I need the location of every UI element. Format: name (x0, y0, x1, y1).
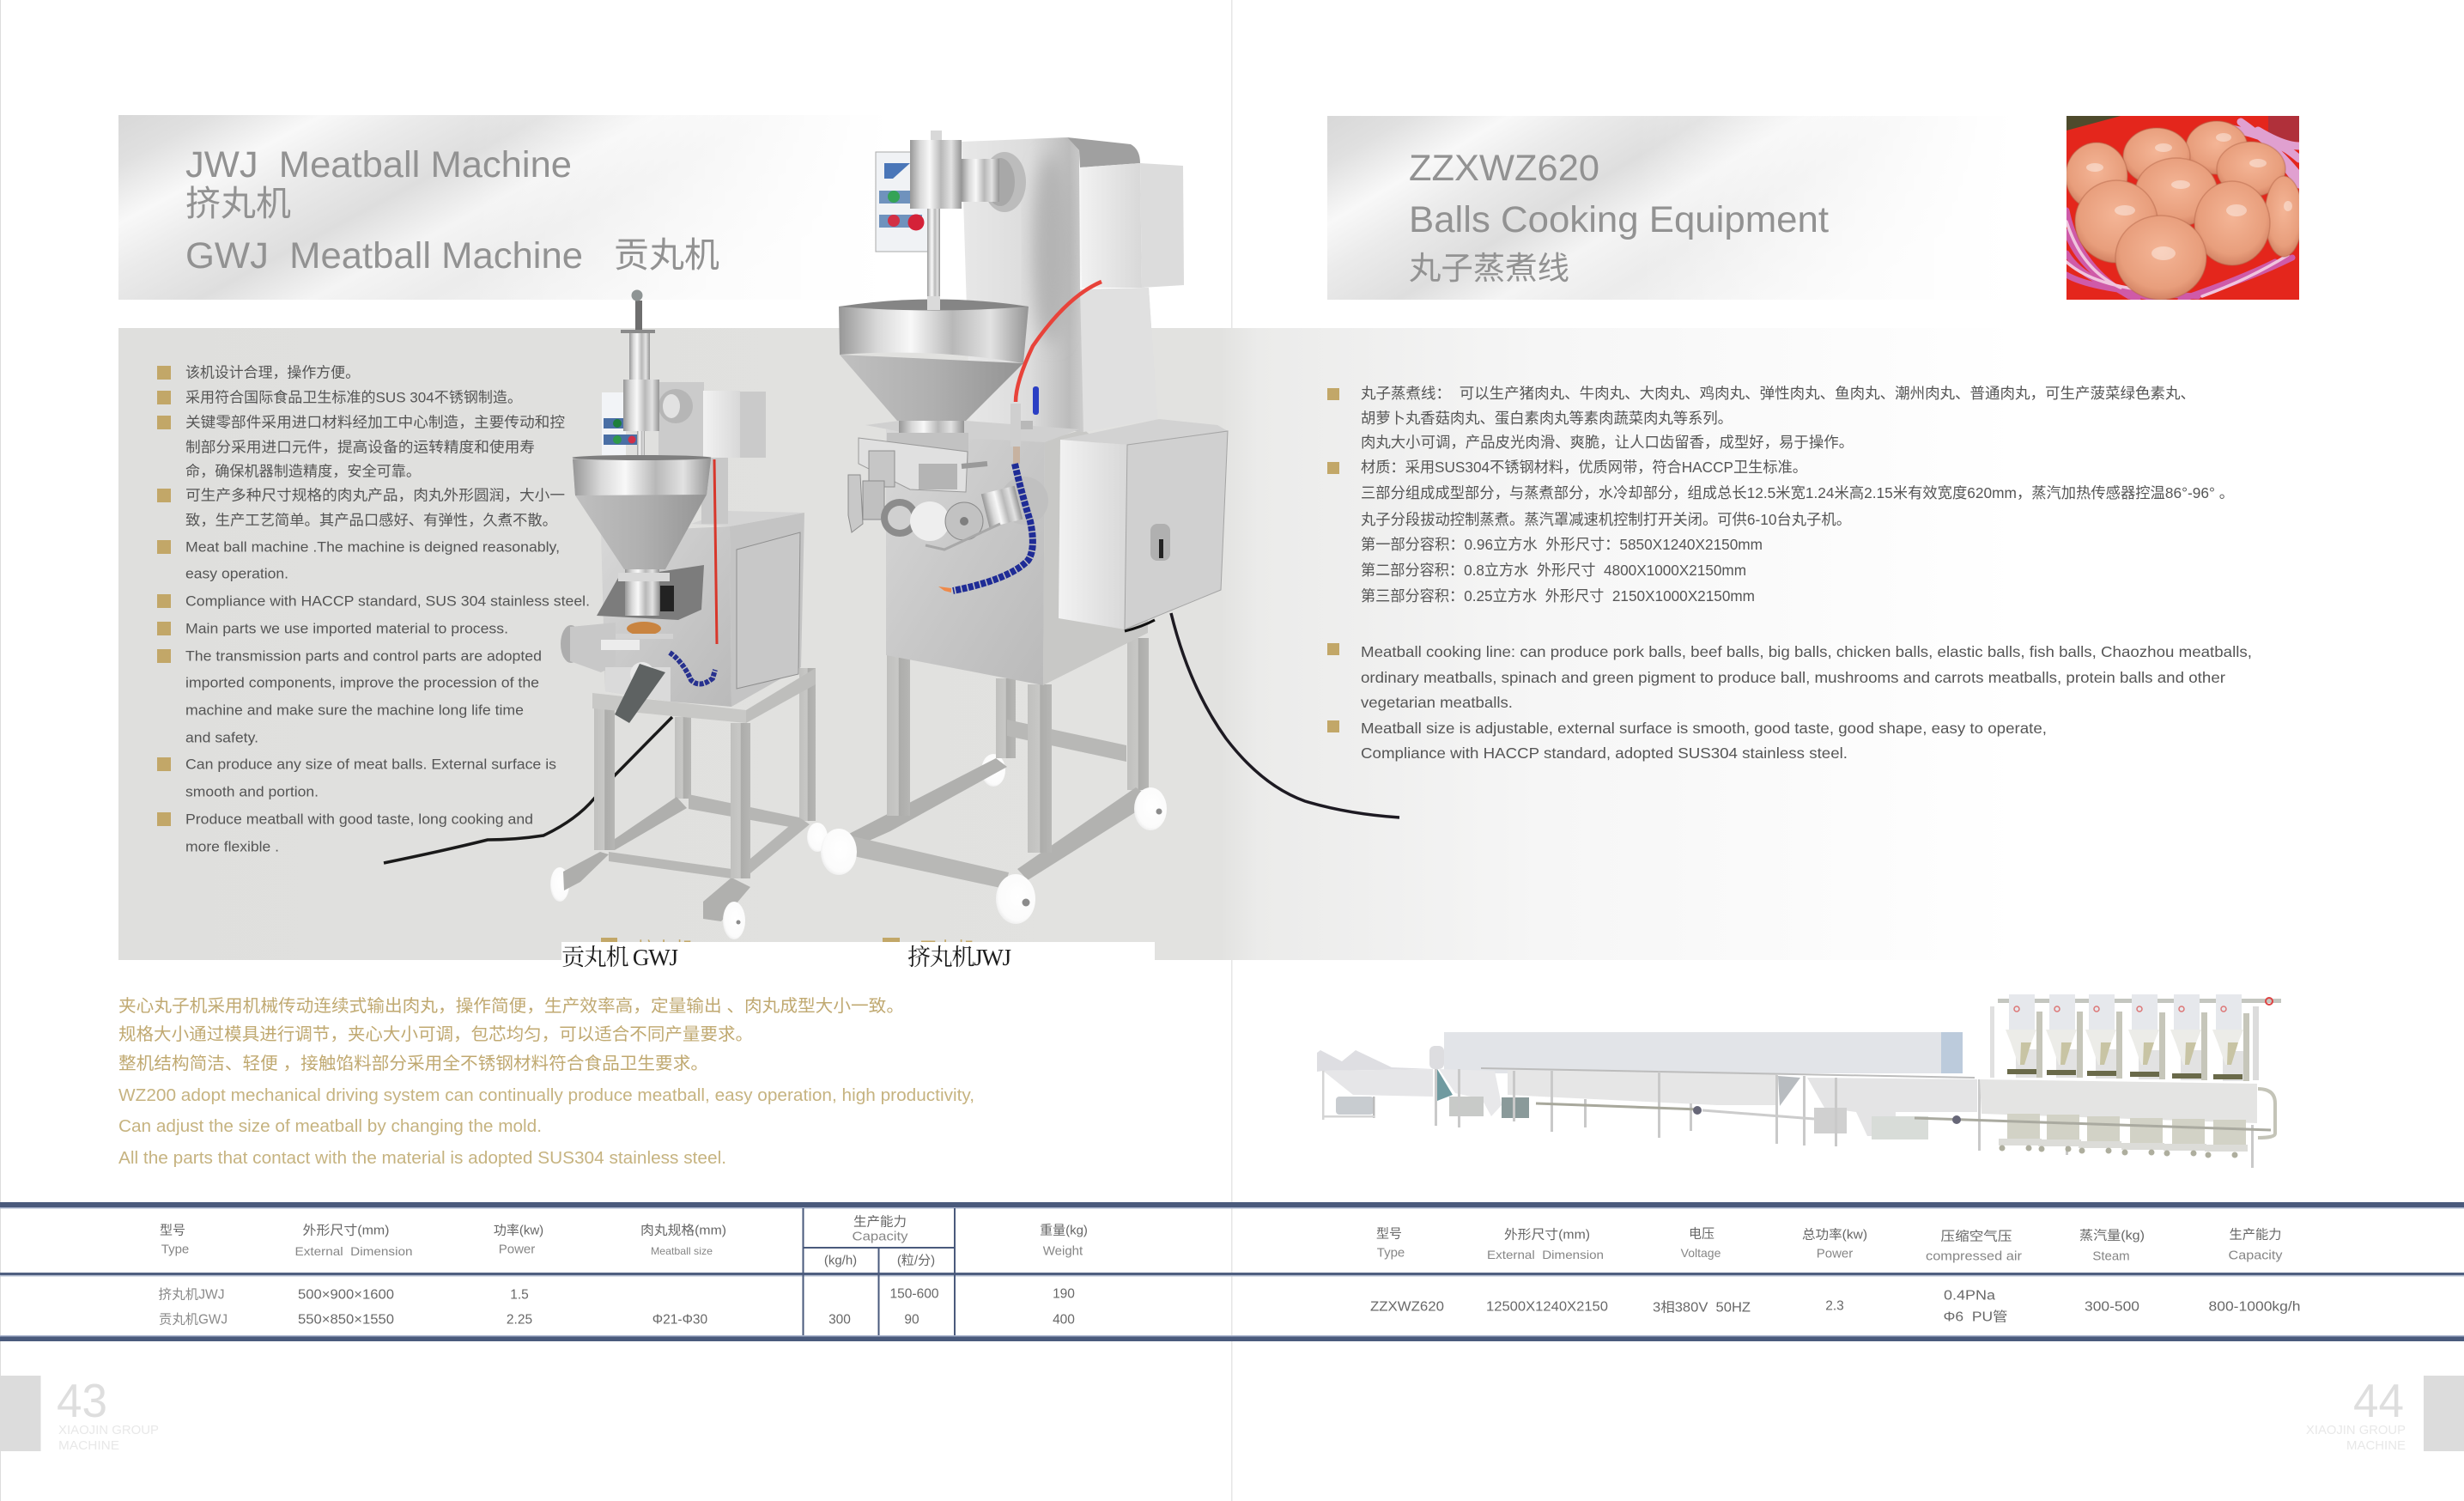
table header: 肉丸规格(mm) (640, 1223, 726, 1238)
table header: Voltage (1681, 1246, 1721, 1260)
blue coolant hose (953, 464, 1033, 591)
feature list: left page: Produce meatball with good taste, long cooking and (185, 811, 533, 828)
orange nozzle (938, 586, 951, 592)
machine: small GWJ meatball machine (384, 290, 828, 939)
spec table: left page (158, 1208, 1088, 1335)
table header: (kg/h) (824, 1254, 857, 1267)
table header: 电压 (1689, 1226, 1714, 1242)
top drive unit (962, 152, 1026, 212)
feature list: right page (1327, 385, 2252, 762)
red air tube (1016, 282, 1102, 402)
table header: 功率(kw) (494, 1223, 543, 1238)
control panel (602, 392, 638, 455)
feature list: right page: 材质：采用SUS304不锈钢材料，优质网带，符合HACCP卫生标准。 (1361, 459, 1807, 476)
glossy highlights (2086, 133, 2292, 260)
table header (160, 1214, 1088, 1267)
discharge chute (615, 664, 665, 723)
table header: 外形尺寸(mm) (302, 1223, 390, 1238)
red air tube (714, 459, 717, 644)
table header: Meatball size (651, 1245, 713, 1257)
partly covered old captions (601, 938, 1017, 960)
table row: GWJ: 300 (828, 1312, 851, 1328)
table row: GWJ: 400 (1053, 1312, 1075, 1328)
gold description text: 整机结构简洁、轻便 ，接触馅料部分采用全不锈钢材料符合食品卫生要求。 (118, 1054, 708, 1073)
table row: GWJ: 贡丸机GWJ (159, 1312, 228, 1328)
page number 44: XIAOJIN GROUP (2306, 1423, 2406, 1437)
feature list: right page: vegetarian meatballs. (1361, 694, 1513, 711)
table row: GWJ: 90 (904, 1312, 919, 1328)
feature list: left page: imported components, improve the procession of the (185, 675, 539, 690)
feature list: right page: Compliance with HACCP standard, adopted SUS304 stainless steel. (1361, 744, 1848, 762)
feature list: right page: 三部分组成成型部分，与蒸煮部分，水冷却部分，组成总长12.5米宽1.24米高2.15米有效宽度620mm，蒸汽加热传感器控温86°-96° 。 (1361, 484, 2234, 501)
stand and wheels (821, 638, 1167, 924)
blue coolant hose (670, 653, 715, 684)
meatballs (2066, 121, 2303, 300)
feature list: left page: 该机设计合理，操作方便。 (185, 364, 360, 381)
page number 43: XIAOJIN GROUP (58, 1423, 159, 1437)
grey feature panel across spread (118, 328, 2018, 960)
header band: left page (118, 115, 892, 300)
title: right page: 丸子蒸煮线 (1409, 251, 1569, 286)
feature list: left page: more flexible . (185, 838, 279, 855)
return pipe loop (2258, 1089, 2275, 1138)
feature list: right page: 丸子蒸煮线： 可以生产猪肉丸、牛肉丸、大肉丸、鸡肉丸、弹性肉丸、鱼肉丸、潮州肉丸、普通肉丸，可生产菠菜绿色素丸、 (1361, 385, 2195, 402)
top pipe and posts (1990, 998, 2281, 1080)
cooling tank (1980, 1079, 2257, 1123)
neck and clamp (887, 421, 968, 467)
main body (886, 429, 1148, 685)
radish strands (2066, 122, 2299, 300)
feature list: left page: 命，确保机器制造精度，安全可靠。 (185, 464, 421, 479)
caption strip with machine names (561, 938, 1155, 970)
capacity cell lines (802, 1208, 956, 1335)
feature list: left page: Compliance with HACCP standard, SUS 304 stainless steel. (185, 592, 590, 610)
table header: 型号 (160, 1223, 185, 1238)
table header: Capacity (2229, 1249, 2283, 1262)
page number 43: MACHINE (58, 1438, 119, 1453)
control panel (876, 152, 929, 252)
table row: JWJ: 500×900×1600 (298, 1288, 394, 1302)
feature list: right page: 丸子分段拔动控制蒸煮。蒸汽罩减速机控制打开关闭。可供6-10台丸子机。 (1361, 511, 1851, 528)
table header: 重量(kg) (1040, 1223, 1088, 1238)
table row: ZZXWZ620: Φ6 PU管 (1944, 1309, 2007, 1324)
table row: GWJ: 550×850×1550 (298, 1312, 394, 1328)
forming mechanism (848, 438, 1048, 550)
feature list: right page: Meatball cooking line: can produce pork balls, beef balls, big balls, chicken balls, elastic balls, fish balls, Chaozhou meatballs, (1361, 643, 2252, 660)
gold description text: All the parts that contact with the material is adopted SUS304 stainless steel. (118, 1149, 726, 1168)
machine: large JWJ meatball machine (821, 131, 1399, 924)
table header: (粒/分) (897, 1254, 935, 1267)
upper cylinder and shaft (910, 131, 962, 310)
table rules (0, 1202, 2464, 1341)
feature list: left page: Can produce any size of meat balls. External surface is (185, 756, 556, 773)
feature list: left page: 关键零部件采用进口材料经加工中心制造，主要传动和控 (185, 414, 565, 431)
support legs and pipes (1435, 1069, 2254, 1168)
spec table: right page (1370, 1226, 2301, 1324)
title: left page: GWJ Meatball Machine (185, 235, 583, 276)
table header: Type (1377, 1245, 1405, 1261)
table row: ZZXWZ620: 12500X1240X2150 (1486, 1300, 1608, 1314)
table row: ZZXWZ620: 800-1000kg/h (2208, 1300, 2301, 1314)
page number 44 (2306, 1374, 2464, 1453)
forming machine 4 (2121, 994, 2165, 1156)
feature list: left page (157, 364, 590, 855)
gold description text (118, 996, 974, 1168)
valve with blue handle (1010, 386, 1039, 464)
feature list: right page: Meatball size is adjustable, external surface is smooth, good taste, good shape, easy to operate, (1361, 720, 2047, 737)
table row: JWJ: 190 (1053, 1286, 1075, 1302)
forming machine 6 (2205, 994, 2249, 1158)
caption: JWJ: 挤丸机JWJ (907, 945, 1011, 970)
title: right page: ZZXWZ620 (1409, 148, 1599, 189)
gold description text: Can adjust the size of meatball by changing the mold. (118, 1117, 542, 1136)
table row: GWJ (159, 1312, 1075, 1328)
table row: ZZXWZ620: ZZXWZ620 (1370, 1300, 1444, 1314)
table row: JWJ: 150-600 (889, 1286, 939, 1302)
feature list: left page: 可生产多种尺寸规格的肉丸产品，肉丸外形圆润，大小一 (185, 488, 565, 503)
feature list: right page: 胡萝卜丸香菇肉丸、蛋白素肉丸等素肉蔬菜肉丸等系列。 (1361, 410, 1733, 427)
top spindle (621, 290, 659, 459)
cooking tank (1437, 1068, 1977, 1139)
forming machine 3 (2079, 994, 2122, 1154)
table header: 总功率(kw) (1802, 1228, 1867, 1242)
side cabinet (1059, 419, 1228, 631)
feature list: left page: and safety. (185, 730, 258, 745)
gold description text: 夹心丸子机采用机械传动连续式输出肉丸，操作简便，生产效率高，定量输出 、肉丸成型大小一致。 (118, 996, 904, 1016)
table header: Capacity (852, 1230, 908, 1243)
feed conveyor (1317, 1050, 1433, 1120)
steam tunnel hood (1429, 1032, 1963, 1073)
table header: 压缩空气压 (1940, 1230, 2012, 1243)
table header: Type (161, 1242, 189, 1257)
six forming machines (1999, 994, 2249, 1158)
forming machine 5 (2164, 994, 2207, 1156)
title: left page: 挤丸机 (185, 184, 291, 223)
feature list: left page: smooth and portion. (185, 783, 319, 800)
feature list: left page: 致，生产工艺简单。其产品口感好、有弹性，久煮不散。 (185, 512, 557, 529)
partly covered old captions: 挤丸机JWJ (637, 939, 731, 960)
feature list: left page: The transmission parts and control parts are adopted (185, 647, 542, 665)
table header: External Dimension (295, 1244, 412, 1258)
table header: compressed air (1926, 1249, 2022, 1264)
hopper (839, 296, 1029, 421)
title: left page (185, 144, 719, 276)
header band: right page (1327, 116, 2015, 300)
gold description text: WZ200 adopt mechanical driving system can continually produce meatball, easy operation, high productivity, (118, 1086, 974, 1105)
table header: Power (499, 1242, 535, 1257)
table header: Weight (1043, 1243, 1083, 1259)
feature list: left page: Main parts we use imported material to process. (185, 620, 508, 637)
hopper (572, 455, 711, 569)
table row: JWJ (158, 1286, 1075, 1302)
lower water pipe (1915, 1115, 2271, 1130)
shelf (865, 421, 1079, 442)
forming machine 1 (1999, 994, 2042, 1151)
table header: 型号 (1376, 1226, 1402, 1242)
title: left page: JWJ Meatball Machine (185, 144, 572, 185)
page number 44: MACHINE (2346, 1438, 2406, 1453)
feature list: left page: 制部分采用进口元件，提高设备的运转精度和使用寿 (185, 438, 535, 455)
table header: Steam (2092, 1249, 2130, 1264)
table header (1376, 1226, 2283, 1264)
feature list: right page: 第一部分容积：0.96立方水 外形尺寸：5850X1240X2150mm (1361, 536, 1763, 553)
partly covered old captions: 贡丸机GWJ (919, 939, 1017, 960)
page number 43: 43 (57, 1374, 107, 1427)
feature list: left page: easy operation. (185, 565, 288, 582)
feature list: left page: 采用符合国际食品卫生标准的SUS 304不锈钢制造。 (185, 390, 522, 405)
power cable (384, 717, 672, 863)
table header: Power (1817, 1247, 1853, 1261)
cabinet (601, 511, 804, 707)
table header: 生产能力 (2229, 1228, 2282, 1242)
table row: ZZXWZ620: 0.4PNa (1944, 1288, 1995, 1304)
page number 44: 44 (2353, 1374, 2404, 1427)
page number 43 (0, 1374, 159, 1453)
table row: ZZXWZ620: 300-500 (2085, 1300, 2139, 1314)
forming machine 2 (2038, 994, 2083, 1152)
page edge and spine (0, 0, 1233, 1501)
feature list: right page: 第三部分容积：0.25立方水 外形尺寸 2150X1000X2150mm (1361, 587, 1755, 605)
table row: GWJ: Φ21-Φ30 (652, 1312, 708, 1328)
table row: ZZXWZ620: 3相380V 50HZ (1653, 1300, 1751, 1316)
stand (550, 668, 828, 939)
table header: 生产能力 (853, 1214, 907, 1230)
table header: 蒸汽量(kg) (2079, 1228, 2145, 1243)
drive box and column (658, 382, 766, 524)
table row: ZZXWZ620: 2.3 (1825, 1298, 1844, 1314)
feature list: left page: machine and make sure the machine long life time (185, 702, 524, 718)
table row: GWJ: 2.25 (507, 1312, 532, 1328)
table header: 外形尺寸(mm) (1504, 1228, 1590, 1242)
feature list: right page: ordinary meatballs, spinach and green pigment to produce ball, mushrooms and carrots meatballs, protein balls and other (1361, 669, 2225, 686)
feature list: right page: 第二部分容积：0.8立方水 外形尺寸 4800X1000X2150mm (1361, 562, 1746, 579)
gold description text: 规格大小通过模具进行调节，夹心大小可调，包芯均匀，可以适合不同产量要求。 (118, 1024, 753, 1044)
rear column (962, 137, 1184, 432)
caption: GWJ: 贡丸机 GWJ (561, 945, 678, 970)
forming tray and neck (597, 565, 704, 639)
title: right page (1409, 148, 1829, 286)
feature list: right page: 肉丸大小可调，产品皮光肉滑、爽脆，让人口齿留香，成型好，易于操作。 (1361, 434, 1854, 451)
table header: External Dimension (1487, 1248, 1604, 1261)
machine: balls cooking production line (1317, 994, 2281, 1168)
power cable (1171, 613, 1399, 817)
title: right page: Balls Cooking Equipment (1409, 199, 1829, 240)
gearbox (561, 623, 671, 702)
table row: JWJ: 挤丸机JWJ (158, 1286, 225, 1302)
photo: cooked meatballs on red plate (2066, 116, 2303, 300)
feature list: left page: Meat ball machine .The machine is deigned reasonably, (185, 539, 560, 555)
table row: JWJ: 1.5 (510, 1288, 529, 1302)
table row: ZZXWZ620 (1370, 1288, 2301, 1324)
title: left page: 贡丸机 (614, 235, 719, 275)
